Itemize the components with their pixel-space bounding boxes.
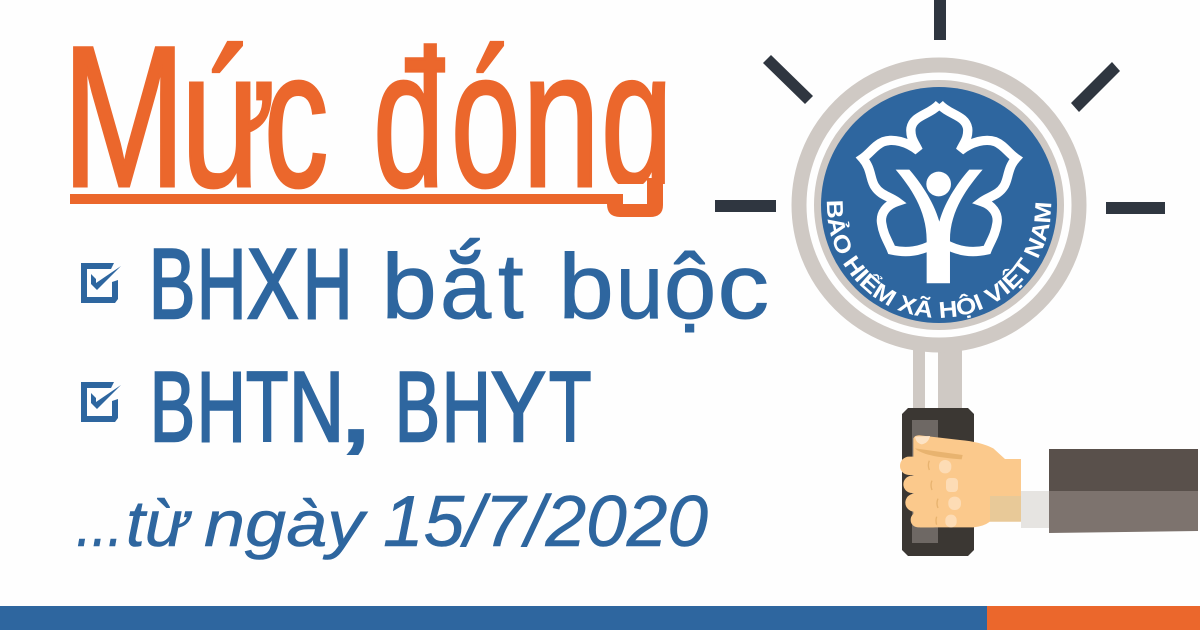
text: BHXH bắt buộc: u bbox=[616, 235, 663, 338]
title: Mức đóng bbox=[73, 40, 666, 190]
magnifier grip bbox=[902, 408, 974, 556]
text: BHXH bắt buộc: c bbox=[718, 235, 769, 338]
hand bbox=[900, 435, 1021, 527]
logo: Bảo hiểm xã hội Việt Nam bbox=[821, 87, 1057, 323]
title: Mức đóng: ó bbox=[451, 10, 520, 228]
text: BHXH bắt buộc: ộ bbox=[664, 235, 716, 338]
text: date: từ bbox=[126, 487, 192, 560]
title underline bbox=[70, 178, 663, 217]
text: BHXH bắt buộc bbox=[149, 229, 769, 340]
text: BHXH bắt buộc: b bbox=[558, 235, 614, 338]
title: Mức đóng: ứ bbox=[181, 10, 275, 228]
magnifier rings bbox=[799, 65, 1079, 345]
text: BHTN, BHYT: T bbox=[246, 353, 288, 463]
title: Mức đóng: c bbox=[264, 10, 328, 228]
bottom bar: orange bbox=[987, 606, 1200, 630]
sleeve bbox=[1049, 449, 1198, 533]
logo human figure bbox=[896, 170, 983, 283]
text: BHTN, BHYT bbox=[150, 351, 591, 463]
text: BHTN, BHYT: , bbox=[338, 352, 374, 463]
checkbox icon: BHTN, BHYT bbox=[81, 382, 121, 422]
title: Mức đóng: đ bbox=[373, 10, 445, 228]
title: Mức đóng: M bbox=[62, 5, 186, 229]
text: date: ... bbox=[76, 487, 123, 560]
text: BHTN, BHYT: T bbox=[549, 353, 591, 463]
text: BHTN, BHYT: Y bbox=[491, 353, 546, 463]
bottom bar: blue bbox=[0, 606, 987, 630]
title: Mức đóng: n bbox=[522, 10, 600, 228]
shirt cuff bbox=[1021, 491, 1049, 528]
text: BHXH bắt buộc: t bbox=[498, 236, 524, 338]
magnifier handle shafts bbox=[913, 340, 962, 408]
text: BHXH bắt buộc: H bbox=[303, 230, 352, 340]
text: BHTN, BHYT: H bbox=[442, 351, 491, 462]
text: BHXH bắt buộc: X bbox=[247, 229, 299, 339]
text: BHTN, BHYT: H bbox=[197, 351, 246, 462]
logo flower outline bbox=[863, 104, 1016, 252]
text: date: ngày bbox=[204, 487, 368, 560]
text: BHTN, BHYT: N bbox=[289, 351, 344, 462]
text: BHTN, BHYT: B bbox=[150, 351, 195, 462]
text: BHXH bắt buộc: H bbox=[197, 230, 246, 340]
text: BHXH bắt buộc: ắ bbox=[440, 236, 492, 338]
text: BHXH bắt buộc: B bbox=[149, 230, 195, 340]
checkbox icon: BHXH bbox=[81, 263, 121, 303]
logo arc path and text: BẢO HIỂM XÃ HỘI VIỆT NAM bbox=[826, 201, 1052, 318]
text: date: 15/7/2020 bbox=[383, 482, 708, 562]
title: Mức đóng: g bbox=[601, 10, 673, 228]
text: BHXH bắt buộc: b bbox=[382, 235, 437, 338]
text: BHTN, BHYT: B bbox=[395, 351, 440, 462]
text: date bbox=[76, 482, 708, 562]
light rays bbox=[715, 0, 1165, 214]
